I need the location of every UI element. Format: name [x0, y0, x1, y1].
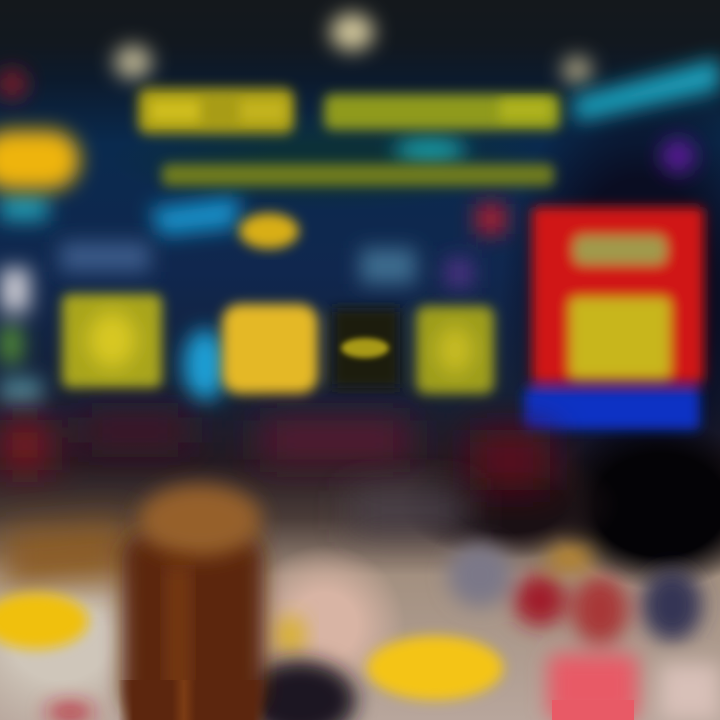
- blue base: [524, 388, 700, 430]
- subtitle: [162, 164, 554, 186]
- panel 3 dark: [332, 308, 400, 388]
- accent lights: [60, 204, 506, 288]
- screen top: [574, 236, 666, 264]
- neon streaks: [0, 58, 720, 401]
- red frame: [532, 207, 704, 383]
- red machine: [524, 207, 704, 430]
- red seats: [0, 415, 550, 490]
- title: [138, 88, 294, 134]
- pink block foot: [552, 700, 634, 720]
- ceiling lights: [0, 13, 695, 173]
- yellow badge: [239, 213, 299, 249]
- screen: [570, 298, 670, 378]
- yellow floor ovals: [0, 593, 503, 700]
- panel 2: [222, 304, 318, 394]
- person: head and hair: [118, 484, 356, 720]
- floor: [0, 490, 470, 590]
- left yellow sign: [0, 130, 80, 404]
- yellow panels: [62, 294, 494, 394]
- panel 1: [62, 294, 162, 388]
- panel 4: [416, 306, 494, 394]
- title highlights: [150, 100, 550, 122]
- panel glow centres: [88, 312, 473, 374]
- crowd: [46, 543, 720, 720]
- title blocks: [138, 88, 560, 186]
- title word: [324, 94, 560, 130]
